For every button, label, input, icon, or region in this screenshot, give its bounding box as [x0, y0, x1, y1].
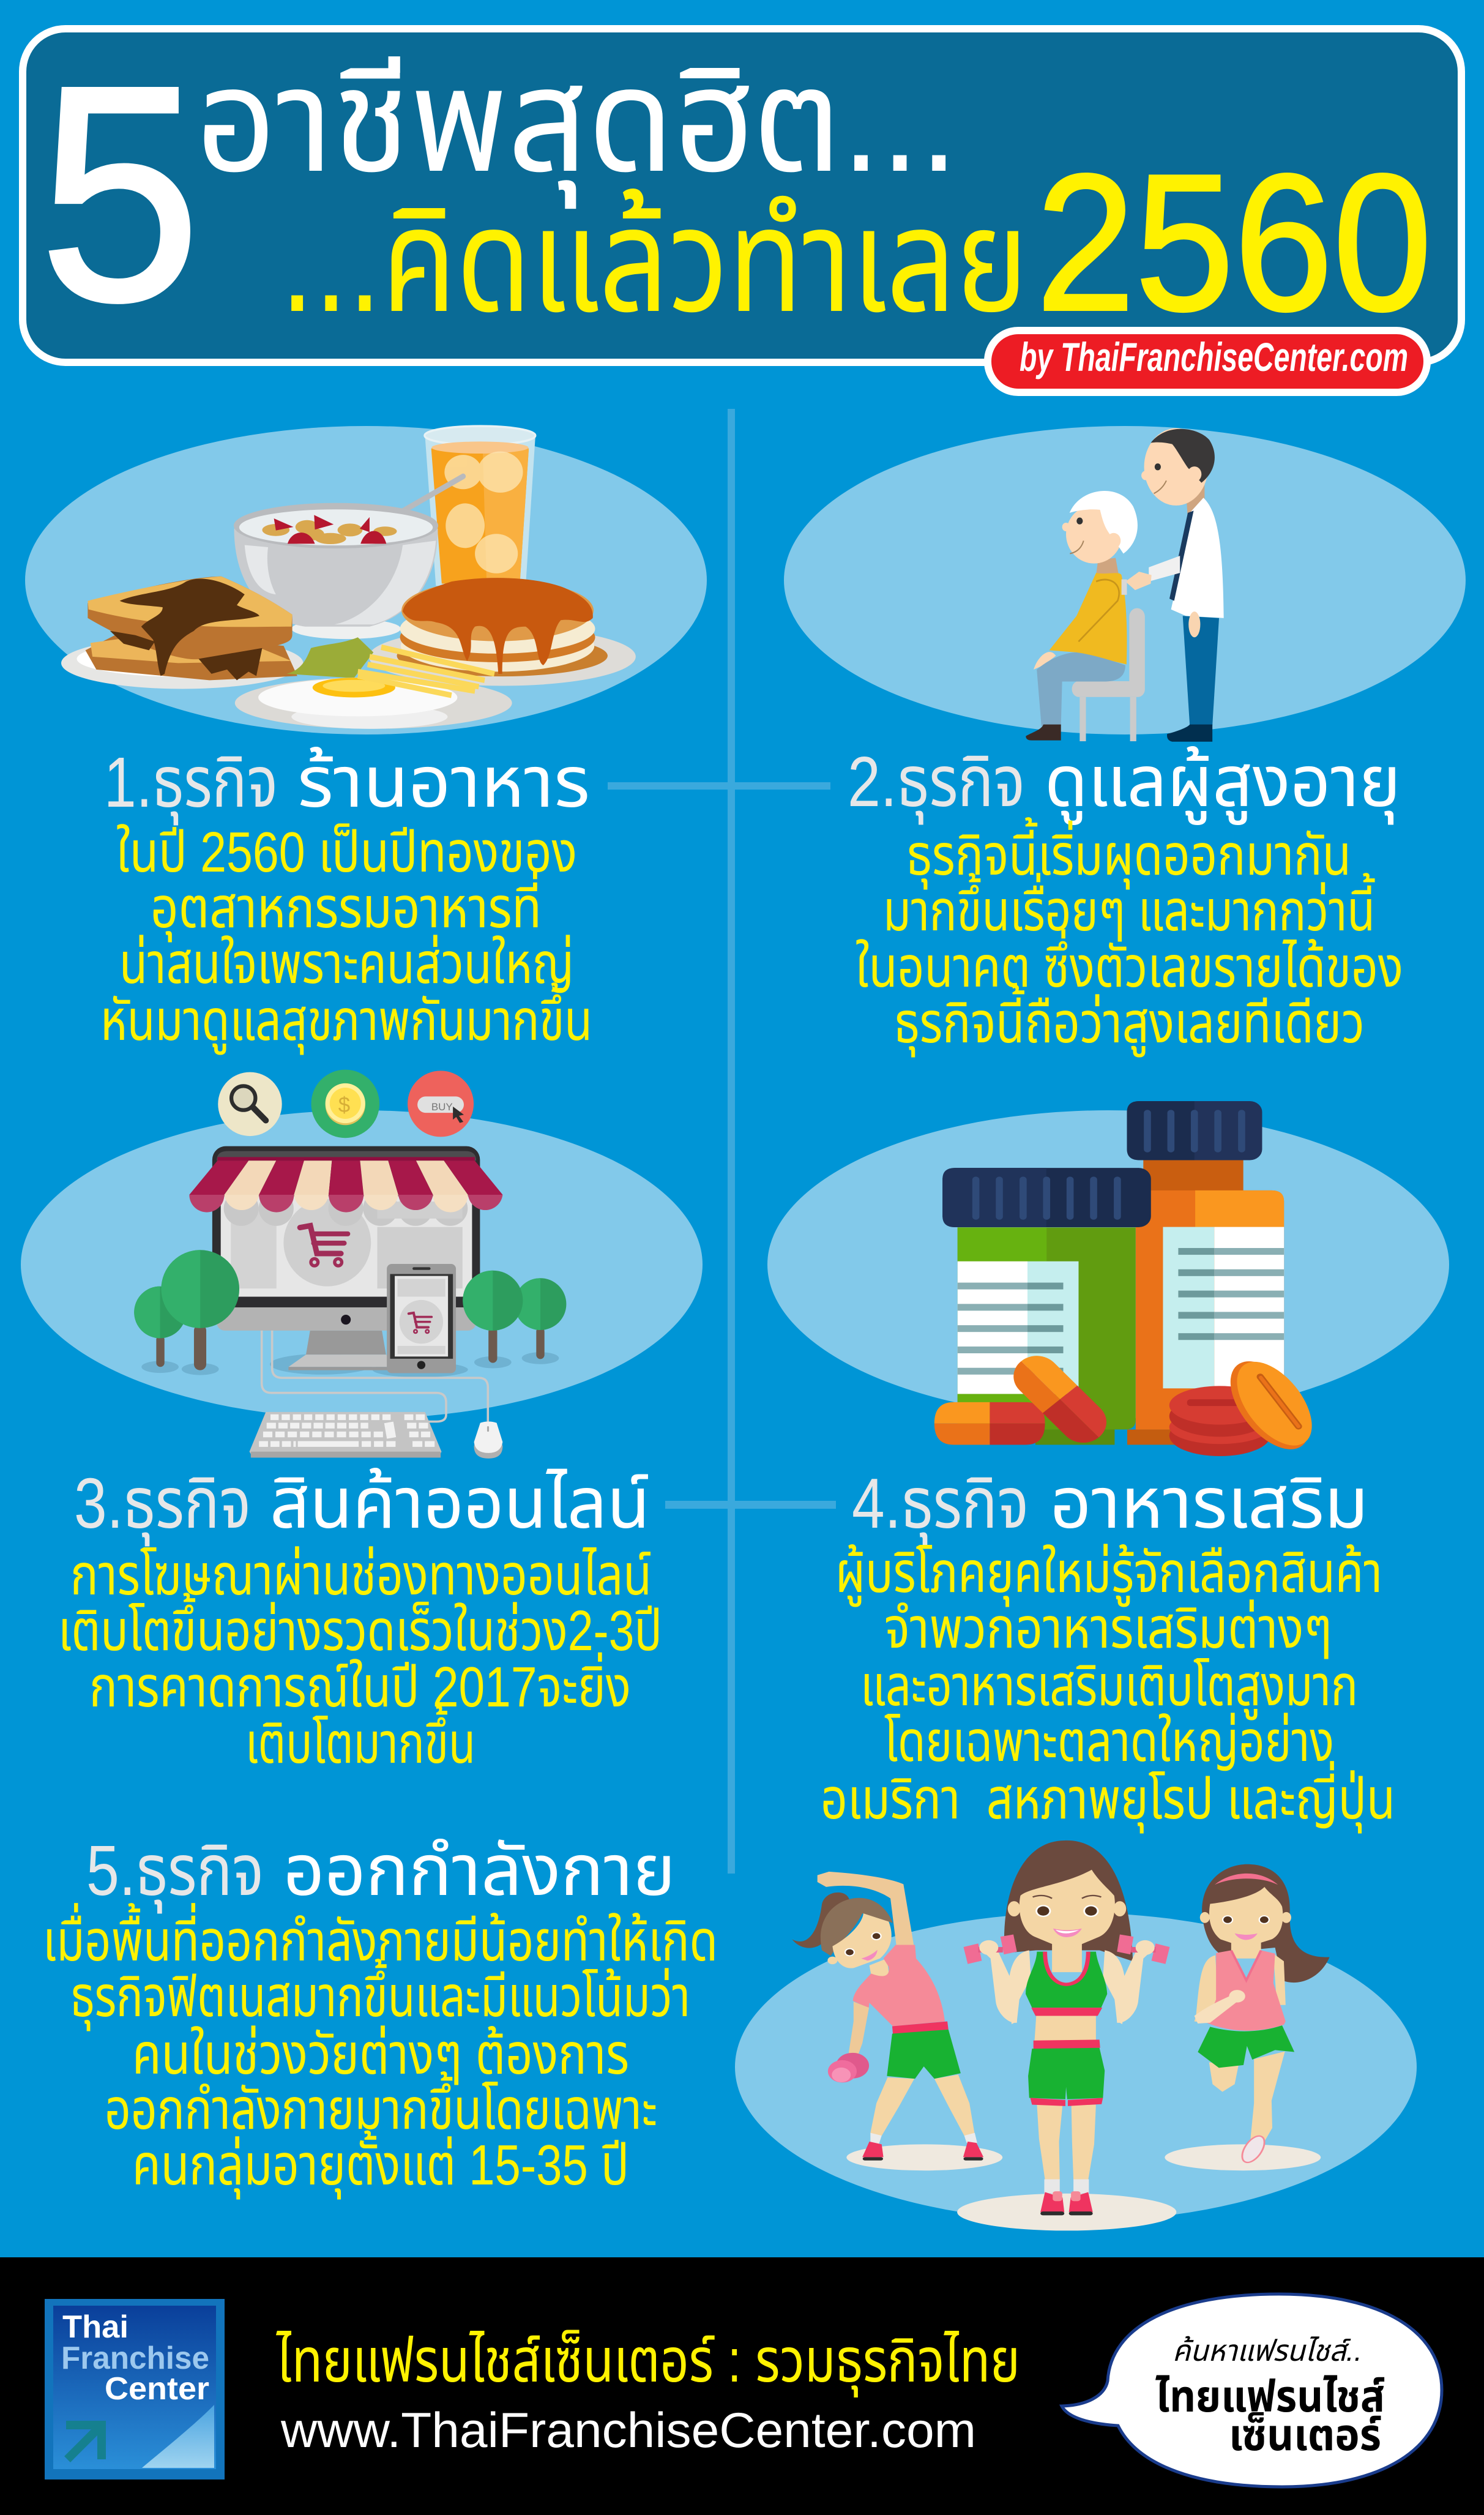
section 3 text: เติบโตมากขึ้น	[245, 1705, 475, 1775]
section 4 text	[821, 1541, 1395, 1833]
speech bubble: ไทยแฟรนไชส์	[1155, 2372, 1385, 2421]
icon: buy button	[408, 1071, 474, 1137]
illustration: supplement bottles and pills	[934, 1101, 1327, 1461]
section 3 text: การโฆษณาผ่านช่องทางออนไลน์	[70, 1543, 652, 1607]
speech bubble	[1062, 2294, 1442, 2487]
section 4 heading	[852, 1463, 1368, 1546]
section 2 heading	[848, 742, 1401, 825]
vertical divider	[728, 409, 735, 1874]
section 2 text	[856, 817, 1403, 1058]
section 1 text: ในปี 2560 เป็นปีทองของ	[116, 820, 577, 884]
section 4 text: โดยเฉพาะตลาดใหญ่อย่าง	[884, 1710, 1334, 1773]
section 5 text: ออกกำลังกายมากขึ้นโดยเฉพาะ	[105, 2071, 657, 2141]
footer Thai tagline: ไทยแฟรนไชส์เซ็นเตอร์ : รวมธุรกิจไทย	[275, 2326, 1020, 2397]
section 3 text: การคาดการณ์ในปี 2017จะยิ่ง	[89, 1652, 631, 1719]
section 5 heading	[86, 1831, 676, 1913]
trees	[134, 1250, 566, 1375]
connector: heading 3 to 4	[665, 1501, 836, 1509]
speech bubble: ค้นหาแฟรนไชส์..	[1173, 2335, 1362, 2367]
section 5 text: ธุรกิจฟิตเนสมากขึ้นและมีแนวโน้มว่า	[70, 1959, 690, 2031]
section 2 text: มากขึ้นเรื่อยๆ และมากกว่านี้	[883, 873, 1375, 943]
title line 1: อาชีพสุดฮิต...	[196, 40, 958, 209]
illustration: three exercising women	[792, 1840, 1330, 2230]
icon: coin: $	[338, 1093, 350, 1117]
section 4 text: จำพวกอาหารเสริมต่างๆ	[884, 1596, 1332, 1660]
pill: diagonal capsule	[1004, 1347, 1116, 1451]
section 4 heading: 4.ธุรกิจ	[852, 1463, 1029, 1546]
section 2 text: ธุรกิจนี้เริ่มผุดออกมากัน	[906, 817, 1351, 889]
footer logo: Thai	[62, 2309, 129, 2345]
section 5 heading: ออกกำลังกาย	[283, 1831, 676, 1910]
section 2 text: ธุรกิจนี้ถือว่าสูงเลยทีเดียว	[894, 985, 1365, 1058]
section 5 text	[43, 1903, 718, 2199]
keyboard	[250, 1412, 441, 1457]
section 1 text: หันมาดูแลสุขภาพกันมากขึ้น	[100, 982, 592, 1055]
byline red pill	[988, 331, 1427, 392]
icon: buy button: BUY	[431, 1101, 453, 1113]
footer logo: Center	[105, 2371, 209, 2407]
illustration: caregiver and elderly man	[1026, 428, 1224, 742]
woman jogging	[1195, 1864, 1330, 2165]
woman with dumbbells	[963, 1840, 1169, 2215]
section 3 text: เติบโตขึ้นอย่างรวดเร็วในช่วง2-3ปี	[58, 1593, 662, 1662]
tablets	[1169, 1350, 1327, 1461]
speech bubble: เซ็นเตอร์	[1229, 2411, 1381, 2460]
connector: heading 1 to 2	[608, 782, 830, 790]
icon: magnifier	[218, 1072, 282, 1136]
tablet	[387, 1264, 456, 1373]
footer logo: Franchise	[61, 2341, 209, 2376]
title year 2560: 2560	[1036, 134, 1432, 351]
section 1 text: น่าสนใจเพราะคนส่วนใหญ่	[119, 932, 574, 995]
section 5 text: คนในช่วงวัยต่างๆ ต้องการ	[132, 2022, 629, 2086]
section 5 heading: 5.ธุรกิจ	[86, 1831, 264, 1913]
title panel	[23, 22, 1461, 364]
section 3 heading	[74, 1463, 650, 1546]
woman stretching	[792, 1872, 983, 2161]
section 3 text	[58, 1543, 662, 1775]
icon: coin	[311, 1070, 379, 1138]
section 1 text: อุตสาหกรรมอาหารที่	[151, 870, 542, 942]
section 1 text	[100, 820, 592, 1055]
icon: logo arrow	[66, 2425, 102, 2459]
section 4 heading: อาหารเสริม	[1050, 1463, 1368, 1543]
section 5 text: เมื่อพื้นที่ออกกำลังกายมีน้อยทำให้เกิด	[43, 1903, 718, 1973]
title numeral 5: 5	[39, 22, 201, 364]
section 1 heading	[104, 742, 590, 825]
title line 2: ...คิดแล้วทำเลย	[280, 180, 1028, 342]
footer website: www.ThaiFranchiseCenter.com	[280, 2403, 976, 2458]
section 5 text: คนกลุ่มอายุตั้งแต่ 15-35 ปี	[132, 2130, 629, 2199]
section 3 heading: 3.ธุรกิจ	[74, 1463, 251, 1546]
illustration: online shop	[134, 1070, 566, 1459]
footer logo	[45, 2299, 225, 2479]
ellipse backgrounds	[21, 426, 1466, 2221]
footer band	[0, 2257, 1484, 2515]
section 2 heading: ดูแลผู้สูงอายุ	[1045, 742, 1401, 825]
section 1 heading: ร้านอาหาร	[297, 742, 590, 822]
section 1 heading: 1.ธุรกิจ	[104, 742, 278, 825]
pill: horizontal capsule	[934, 1402, 1045, 1444]
section 2 heading: 2.ธุรกิจ	[848, 742, 1025, 824]
illustration: food	[61, 426, 636, 729]
section 4 text: และอาหารเสริมเติบโตสูงมาก	[860, 1654, 1358, 1721]
section 3 heading: สินค้าออนไลน์	[270, 1463, 650, 1543]
mouse	[474, 1422, 502, 1459]
